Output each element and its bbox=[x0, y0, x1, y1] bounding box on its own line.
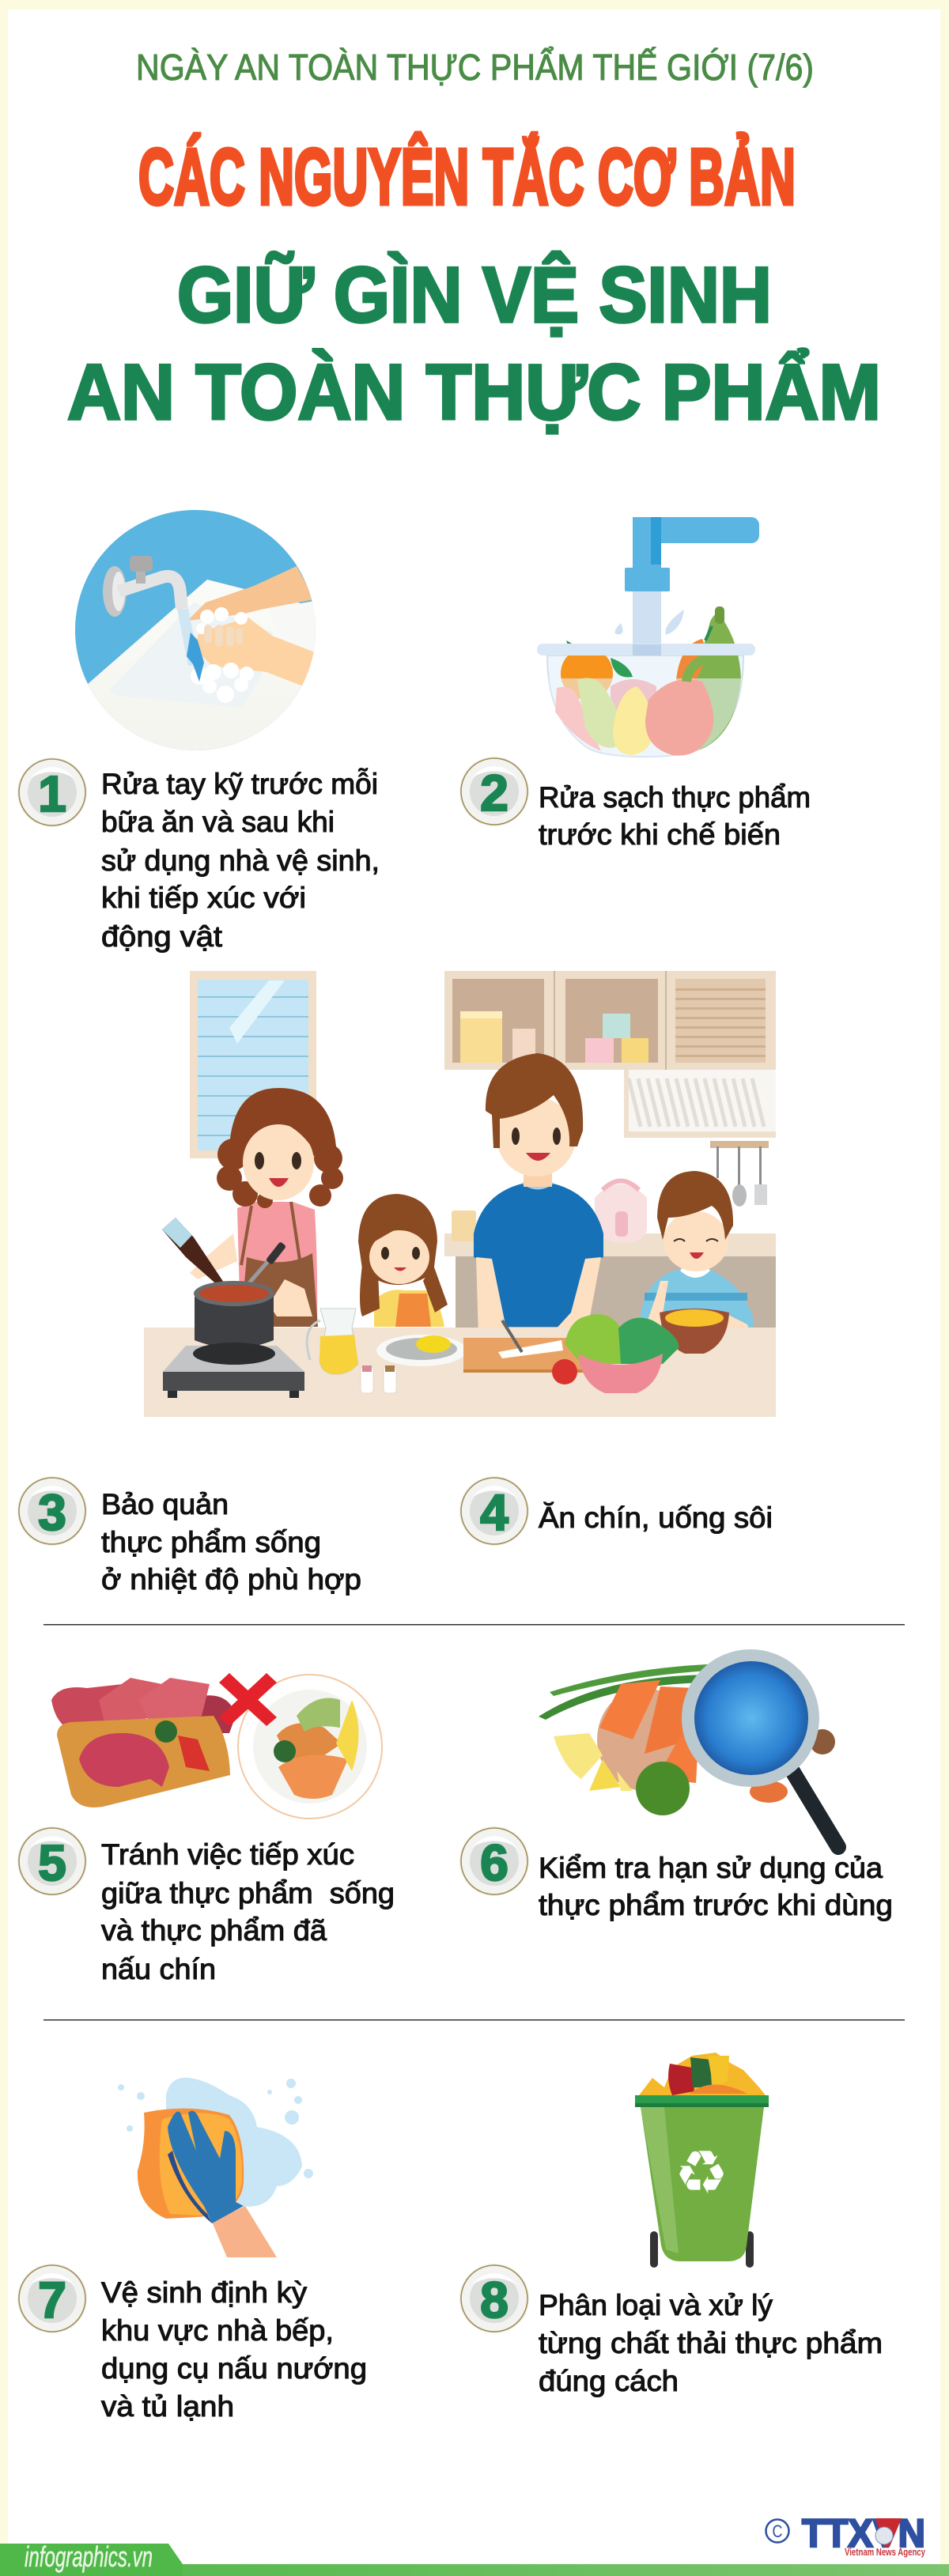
text: item 5 bbox=[101, 1838, 395, 1985]
badge 3 bbox=[17, 1476, 87, 1546]
text: item 6 bbox=[539, 1852, 893, 1921]
rice cooker bbox=[595, 1181, 647, 1243]
icon: recycle symbol: ♻ bbox=[675, 2137, 728, 2208]
footer source: infographics.vn bbox=[25, 2540, 153, 2573]
heading: event title: NGÀY AN TOÀN THỰC PHẨM THẾ GIỚI (7/6) bbox=[136, 47, 814, 88]
text: item 1 bbox=[101, 768, 380, 953]
illustration: gloved hand cleaning with sponge bbox=[118, 2078, 313, 2257]
utensils bbox=[710, 1141, 769, 1207]
badge 1 bbox=[17, 757, 87, 827]
text: item 8: Phân loại và xử lý bbox=[539, 2289, 773, 2321]
badge 6: 6 bbox=[480, 1834, 509, 1891]
text: item 5: Tránh việc tiếp xúc bbox=[101, 1838, 354, 1871]
heading: green title bbox=[67, 251, 881, 436]
stove bbox=[163, 1343, 304, 1398]
text: item 5: nấu chín bbox=[101, 1953, 216, 1985]
badge 4: 4 bbox=[480, 1484, 509, 1541]
badge 5: 5 bbox=[38, 1834, 66, 1891]
text: item 1: Rửa tay kỹ trước mỗi bbox=[101, 768, 378, 800]
illustration: washing hands bbox=[71, 506, 320, 755]
logo: TTXVN: C bbox=[772, 2521, 783, 2541]
badge 5 bbox=[17, 1826, 87, 1896]
text: item 5: và thực phẩm đã bbox=[101, 1914, 327, 1947]
text: item 7: và tủ lạnh bbox=[101, 2390, 234, 2423]
text: item 2: Rửa sạch thực phẩm bbox=[539, 781, 811, 814]
tomato bbox=[552, 1359, 577, 1384]
text: item 1: động vật bbox=[101, 920, 223, 953]
badge 2 bbox=[459, 757, 529, 826]
text: item 7: Vệ sinh định kỳ bbox=[101, 2276, 308, 2309]
heading: green title: GIỮ GÌN VỆ SINH bbox=[177, 251, 772, 338]
text: item 1: bữa ăn và sau khi bbox=[101, 806, 335, 838]
logo: TTXVN: TTXVN bbox=[802, 2511, 925, 2555]
badge 7: 7 bbox=[38, 2272, 66, 2329]
badge 3: 3 bbox=[38, 1484, 66, 1541]
wall cabinets bbox=[444, 971, 776, 1070]
text: item 3: ở nhiệt độ phù hợp bbox=[101, 1563, 361, 1596]
dad bbox=[474, 1053, 603, 1352]
jug bbox=[307, 1309, 358, 1374]
text: item 3: Bảo quản bbox=[101, 1488, 229, 1520]
salad bowl bbox=[565, 1314, 679, 1393]
badge 8: 8 bbox=[480, 2272, 509, 2329]
text: item 8: từng chất thải thực phẩm bbox=[539, 2327, 883, 2359]
window bbox=[190, 971, 316, 1158]
dish rack bbox=[624, 1070, 776, 1138]
pot bbox=[194, 1281, 274, 1348]
text: item 6: thực phẩm trước khi dùng bbox=[539, 1889, 893, 1921]
badge 7 bbox=[17, 2264, 87, 2333]
son bbox=[640, 1171, 753, 1336]
text: item 8: đúng cách bbox=[539, 2365, 679, 2397]
badge 6 bbox=[459, 1826, 529, 1896]
illustration: washing food in a bowl bbox=[537, 517, 759, 757]
mum bbox=[162, 1088, 343, 1327]
text: item 8 bbox=[539, 2289, 883, 2397]
heading: green title: AN TOÀN THỰC PHẨM bbox=[67, 348, 881, 436]
text: item 1: sử dụng nhà vệ sinh, bbox=[101, 844, 380, 877]
jar bbox=[452, 1211, 476, 1241]
icon: red cross bbox=[219, 1673, 277, 1726]
illustration: family cooking in the kitchen bbox=[144, 971, 776, 1417]
illustration: green waste bin with food scraps bbox=[635, 2053, 769, 2268]
badge 4 bbox=[459, 1476, 529, 1546]
text: item 6: Kiểm tra hạn sử dụng của bbox=[539, 1852, 883, 1884]
text: item 5: giữa thực phẩm sống bbox=[101, 1877, 395, 1909]
text: item 2: trước khi chế biến bbox=[539, 818, 781, 851]
text: item 2 bbox=[539, 781, 811, 851]
text: item 3 bbox=[101, 1488, 361, 1596]
egg bowl bbox=[660, 1309, 729, 1354]
illustration: magnifier over salmon bbox=[539, 1649, 838, 1847]
badge 1: 1 bbox=[38, 765, 66, 822]
text: item 7: dụng cụ nấu nướng bbox=[101, 2352, 367, 2385]
plate and lemons bbox=[376, 1335, 467, 1366]
counter bbox=[144, 1328, 776, 1417]
text: item 1: khi tiếp xúc với bbox=[101, 882, 306, 914]
text: item 7 bbox=[101, 2276, 367, 2423]
salt shakers bbox=[361, 1365, 396, 1393]
badge 8 bbox=[459, 2264, 529, 2333]
footer bar bbox=[0, 2540, 949, 2576]
text: item 7: khu vực nhà bếp, bbox=[101, 2314, 334, 2347]
badge 2: 2 bbox=[480, 765, 509, 822]
girl bbox=[358, 1194, 448, 1327]
cutting board and vegetable bbox=[463, 1320, 585, 1373]
illustration: raw meat separated from cooked food bbox=[51, 1675, 382, 1819]
text: item 3: thực phẩm sống bbox=[101, 1526, 321, 1558]
text: item 4: Ăn chín, uống sôi bbox=[539, 1501, 773, 1534]
back counter bbox=[444, 1233, 776, 1256]
